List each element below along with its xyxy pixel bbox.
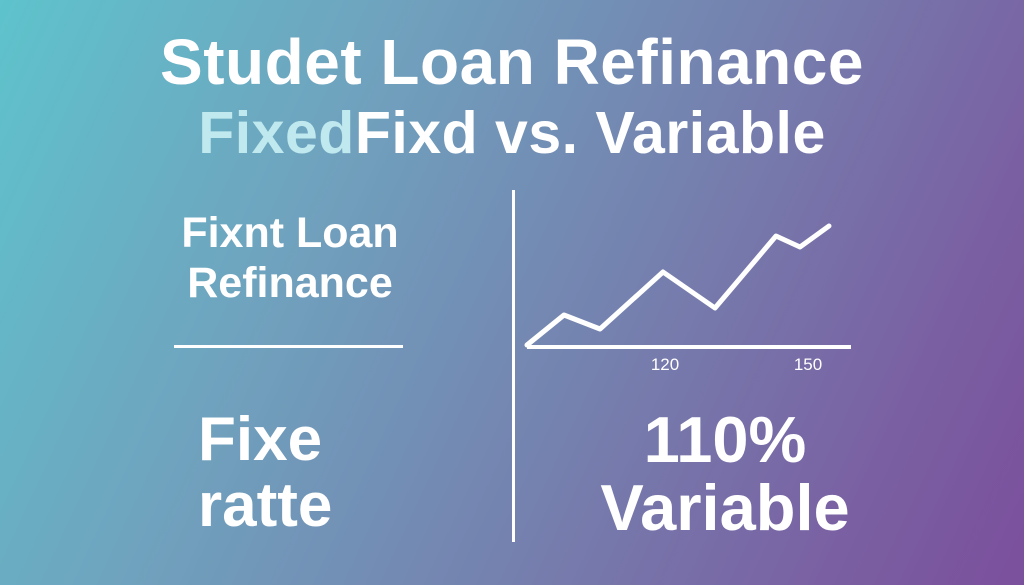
left heading: Refinance [187, 259, 393, 307]
left heading [181, 209, 399, 307]
left heading: Fixnt Loan [181, 209, 399, 257]
left big text [198, 405, 332, 540]
line chart: 150 [794, 355, 822, 374]
vertical divider [512, 190, 515, 542]
title: Studet Loan Refinance [160, 26, 864, 98]
subtitle: FixedFixd vs. Variable [198, 100, 826, 166]
right big text: 110% [644, 403, 806, 476]
line chart: 120 [651, 355, 679, 374]
left big text: ratte [198, 471, 332, 540]
left big text: Fixe [198, 405, 322, 474]
right big text [600, 403, 850, 544]
divider left [174, 345, 403, 348]
right big text: Variable [600, 471, 850, 544]
